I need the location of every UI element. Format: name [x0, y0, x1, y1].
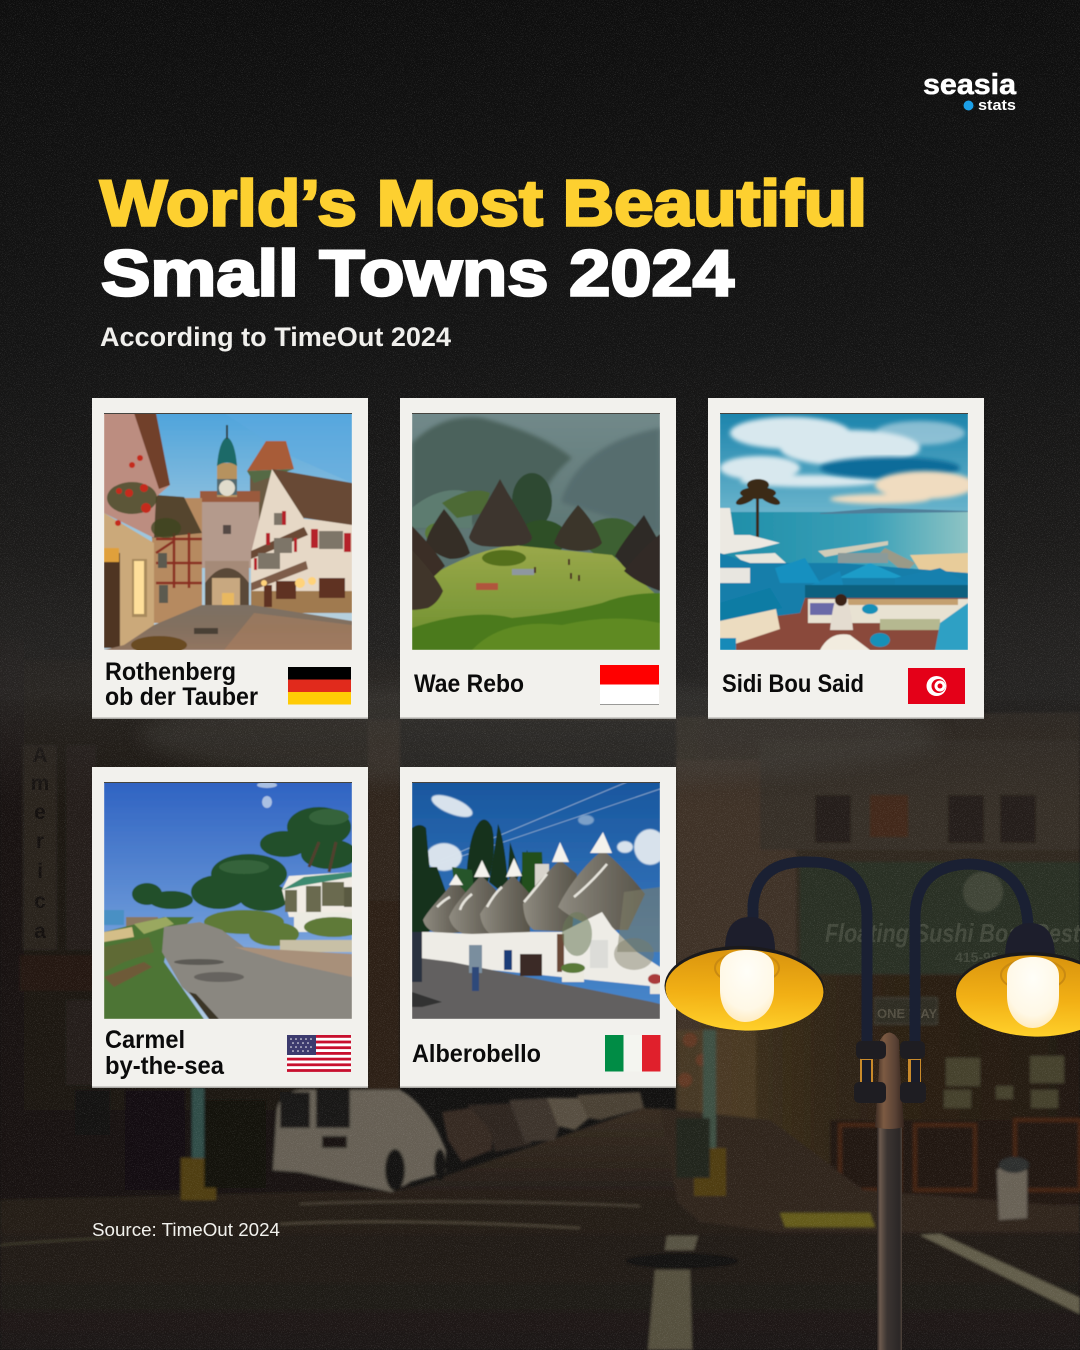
logo: seasia stats: seasia [923, 69, 1017, 101]
photo: Wae Rebo cone huts [412, 413, 660, 650]
restaurant phone number: 415-95 [955, 949, 999, 965]
vertical sign: America: c [34, 890, 46, 913]
vertical sign: America: m [31, 772, 49, 795]
vertical sign: America: a [34, 920, 46, 943]
title [100, 166, 867, 310]
panel: Wae Rebo [400, 398, 676, 719]
label: Alberobello: Alberobello [412, 1040, 541, 1068]
lamp pole and bracket [875, 1032, 904, 1350]
flag: Italy [605, 1035, 660, 1072]
lamp clamps [854, 1041, 926, 1103]
label: Rothenberg ob der Tauber: Rothenberg [105, 658, 236, 686]
flag: Tunisia [908, 668, 965, 704]
logo: seasia stats [923, 69, 1017, 114]
flag: Germany [288, 667, 351, 704]
panel: Alberobello [400, 767, 676, 1088]
panel: Sidi Bou Said [708, 398, 984, 719]
panel: Rothenberg ob der Tauber [92, 398, 368, 719]
left lamp [663, 917, 826, 1033]
vertical sign: America: i [37, 860, 43, 883]
photo: Carmel coastal road [104, 782, 364, 1019]
label: Rothenberg ob der Tauber: ob der Tauber [105, 683, 258, 711]
double street lamp [663, 862, 1080, 1350]
lamp arms [753, 862, 1028, 1045]
right lamp [954, 923, 1080, 1039]
street scene photograph layer [0, 640, 1080, 1350]
one way street sign text: ONE WAY [877, 1006, 938, 1021]
source note: Source: TimeOut 2024 [92, 1219, 280, 1240]
vertical sign: America: A [32, 744, 48, 767]
title: World’s Most Beautiful [100, 166, 867, 240]
vertical sign: America: e [34, 801, 46, 824]
subtitle: According to TimeOut 2024 [100, 322, 451, 352]
label: Sidi Bou Said: Sidi Bou Said [722, 670, 864, 698]
photo: Rothenberg street and clock tower [104, 413, 352, 654]
title: Small Towns 2024 [101, 236, 734, 310]
photo: Sidi Bou Said sea view [720, 413, 975, 650]
label: Carmel by-the-sea: Carmel [105, 1026, 185, 1054]
label: Carmel by-the-sea: by-the-sea [105, 1052, 225, 1080]
flag: United States [287, 1035, 351, 1072]
vertical sign: America: r [36, 830, 44, 853]
logo: seasia stats: stats [978, 97, 1016, 114]
photo: Alberobello trulli houses [412, 782, 666, 1019]
flag: Indonesia [600, 665, 659, 705]
label: Wae Rebo: Wae Rebo [414, 670, 524, 698]
panel: Carmel by-the-sea [92, 767, 368, 1088]
